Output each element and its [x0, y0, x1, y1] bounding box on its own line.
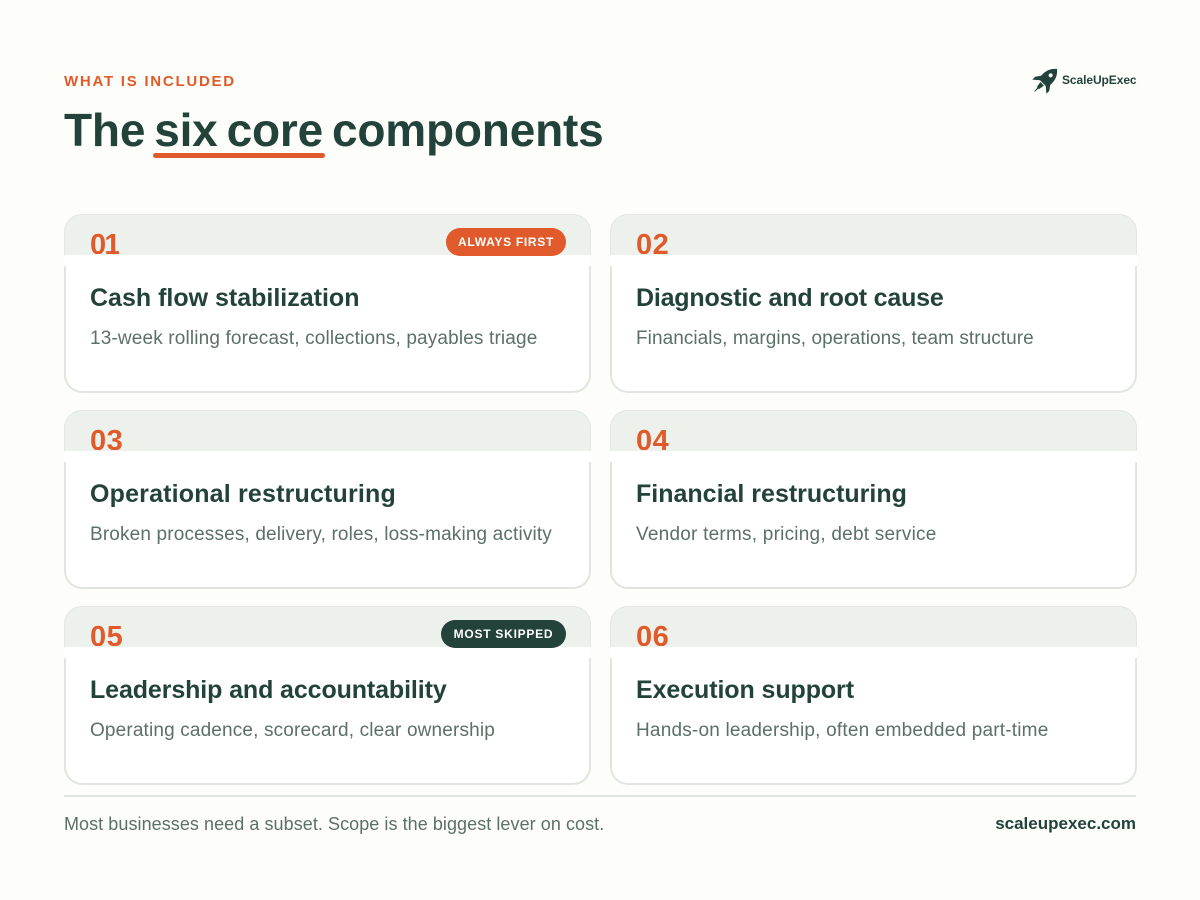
card description 05: Operating cadence, scorecard, clear ownership — [90, 720, 495, 741]
card heading 04: Financial restructuring — [636, 480, 907, 508]
badge: most skipped — [441, 620, 566, 648]
logo wordmark: ScaleUpExec — [1062, 73, 1137, 87]
badge: most skipped: MOST SKIPPED — [454, 627, 553, 641]
panel: card 01 — [64, 214, 591, 393]
panel: card 03 — [64, 410, 591, 589]
panel: card 04 — [610, 410, 1137, 589]
title: The six core components — [64, 104, 604, 156]
card description 04: Vendor terms, pricing, debt service — [636, 524, 937, 545]
card heading 06: Execution support — [636, 676, 854, 704]
logo — [1032, 68, 1137, 94]
badge: always first — [446, 228, 566, 256]
card description 06: Hands-on leadership, often embedded part-time — [636, 720, 1048, 741]
footer url: scaleupexec.com — [995, 814, 1136, 833]
card heading 03: Operational restructuring — [90, 480, 396, 508]
panel: card 06 — [610, 606, 1137, 785]
card description 03: Broken processes, delivery, roles, loss-making activity — [90, 524, 552, 545]
card description 02: Financials, margins, operations, team structure — [636, 328, 1034, 349]
card heading 02: Diagnostic and root cause — [636, 284, 944, 312]
title underline accent — [153, 153, 325, 158]
card heading 01: Cash flow stabilization — [90, 284, 359, 312]
footer note: Most businesses need a subset. Scope is the biggest lever on cost. — [64, 814, 604, 834]
card description 01: 13-week rolling forecast, collections, payables triage — [90, 328, 537, 349]
icon: rocket — [1032, 68, 1058, 94]
badge: always first: ALWAYS FIRST — [458, 235, 554, 249]
panel: card 02 — [610, 214, 1137, 393]
panel: card 05 — [64, 606, 591, 785]
card heading 05: Leadership and accountability — [90, 676, 447, 704]
eyebrow label: WHAT IS INCLUDED — [64, 73, 236, 90]
